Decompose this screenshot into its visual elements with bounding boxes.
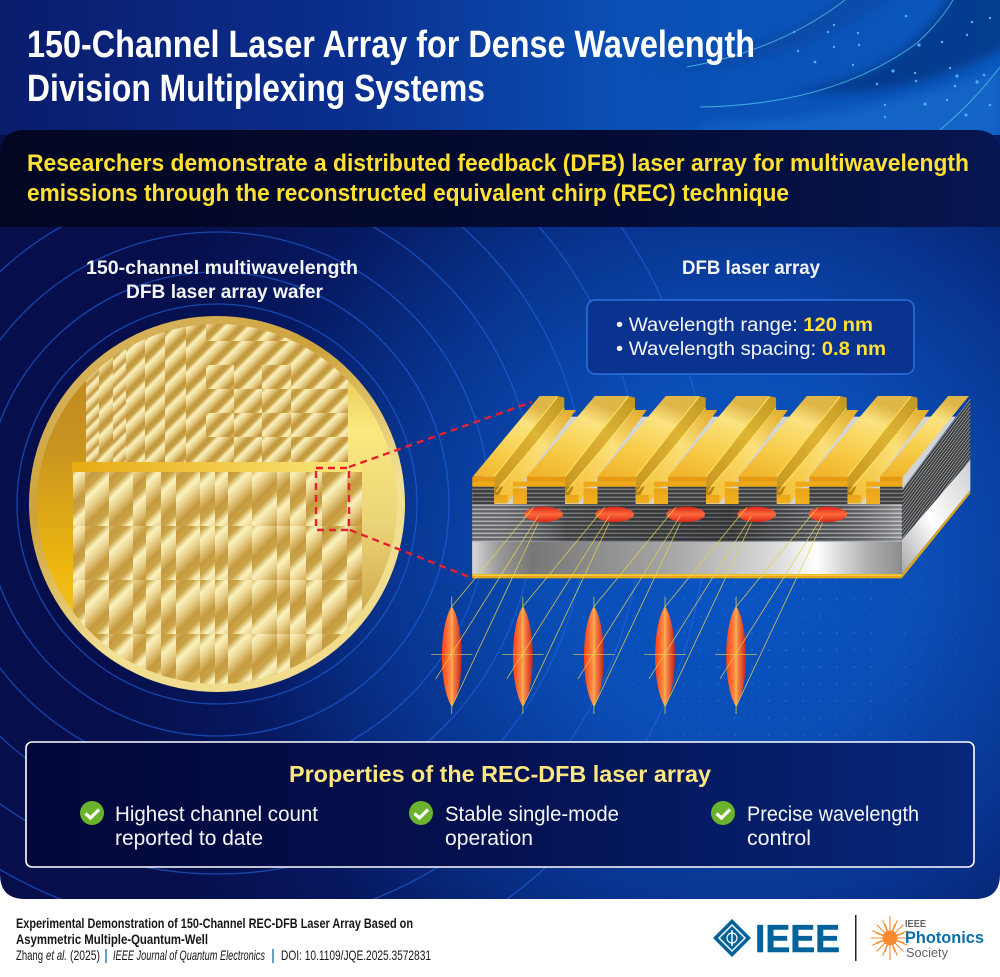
title: [27, 24, 755, 110]
IEEE logo: [713, 918, 840, 961]
slot between die blocks: [72, 462, 362, 472]
property: channel count: [80, 801, 318, 850]
citation: et al.: [46, 947, 67, 963]
chip side stripes: [902, 398, 970, 540]
chip side silver: [902, 460, 970, 574]
IEEE Photonics Society logo: [871, 916, 984, 960]
subtitle band: emissions through the reconstructed equivalent chirp (REC) technique: [27, 180, 789, 207]
subtitle band: Researchers demonstrate a distributed feedback (DFB) laser array for multiwavelength: [27, 150, 969, 177]
chip top surface: [472, 417, 956, 504]
emission spots and beam profiles: [431, 507, 847, 714]
properties panel: [26, 742, 974, 867]
logo divider: [855, 915, 856, 961]
zoom callout: dashed lines: [316, 402, 532, 578]
decorative swoosh top right: [687, 0, 1000, 133]
property: wavelength control: [711, 801, 919, 850]
chip side gold edge: [902, 490, 970, 578]
wafer heading: 150-channel multiwavelength: [86, 258, 358, 279]
IEEE Photonics Society logo: Society: [906, 945, 948, 960]
property: single mode: [409, 801, 619, 850]
IEEE logo: IEEE: [755, 918, 840, 961]
wavelength specs box: • Wavelength spacing: 0.8 nm: [616, 339, 886, 360]
citation: (2025): [70, 947, 100, 963]
gold ridges: [472, 396, 969, 504]
rings and dots background: [0, 227, 940, 899]
citation: Asymmetric Multiple-Quantum-Well: [16, 931, 208, 947]
IEEE Photonics Society logo: Photonics: [905, 929, 984, 947]
wafer heading: [86, 258, 358, 303]
title: 150-Channel Laser Array for Dense Wavelength: [27, 24, 755, 66]
property: wavelength control: control: [747, 827, 811, 850]
properties heading: Properties of the REC-DFB laser array: [289, 761, 711, 787]
laser array heading: DFB laser array: [682, 258, 820, 279]
lower die block: [73, 472, 362, 688]
property: single mode: operation: [445, 827, 533, 850]
citation: Zhang: [16, 947, 43, 963]
IEEE Photonics Society logo: IEEE: [905, 918, 926, 930]
chip front layers: [472, 490, 902, 578]
citation: Experimental Demonstration of 150-Channel REC-DFB Laser Array Based on: [16, 915, 413, 931]
property: single mode: Stable single-mode: [445, 803, 619, 826]
wafer disc: [29, 316, 405, 692]
citation: IEEE Journal of Quantum Electronics: [113, 947, 265, 963]
upper die block: [86, 316, 348, 462]
title: Division Multiplexing Systems: [27, 68, 485, 110]
property: channel count: Highest channel count: [115, 803, 318, 826]
icon: IEEE diamond: [713, 919, 751, 957]
wavelength specs box: • Wavelength range: 120 nm: [616, 315, 873, 336]
property: channel count: reported to date: [115, 827, 263, 850]
wafer die grid: [72, 316, 362, 688]
wavelength specs box: [587, 300, 914, 374]
wafer heading: DFB laser array wafer: [126, 282, 324, 303]
property: wavelength control: Precise wavelength: [747, 803, 919, 826]
icon: photonics sunburst: [871, 916, 909, 960]
citation: [16, 915, 431, 963]
DFB laser chip: [431, 396, 1000, 714]
subtitle band: [0, 130, 1000, 227]
citation: DOI: 10.1109/JQE.2025.3572831: [281, 947, 431, 963]
wafer: [29, 316, 405, 692]
